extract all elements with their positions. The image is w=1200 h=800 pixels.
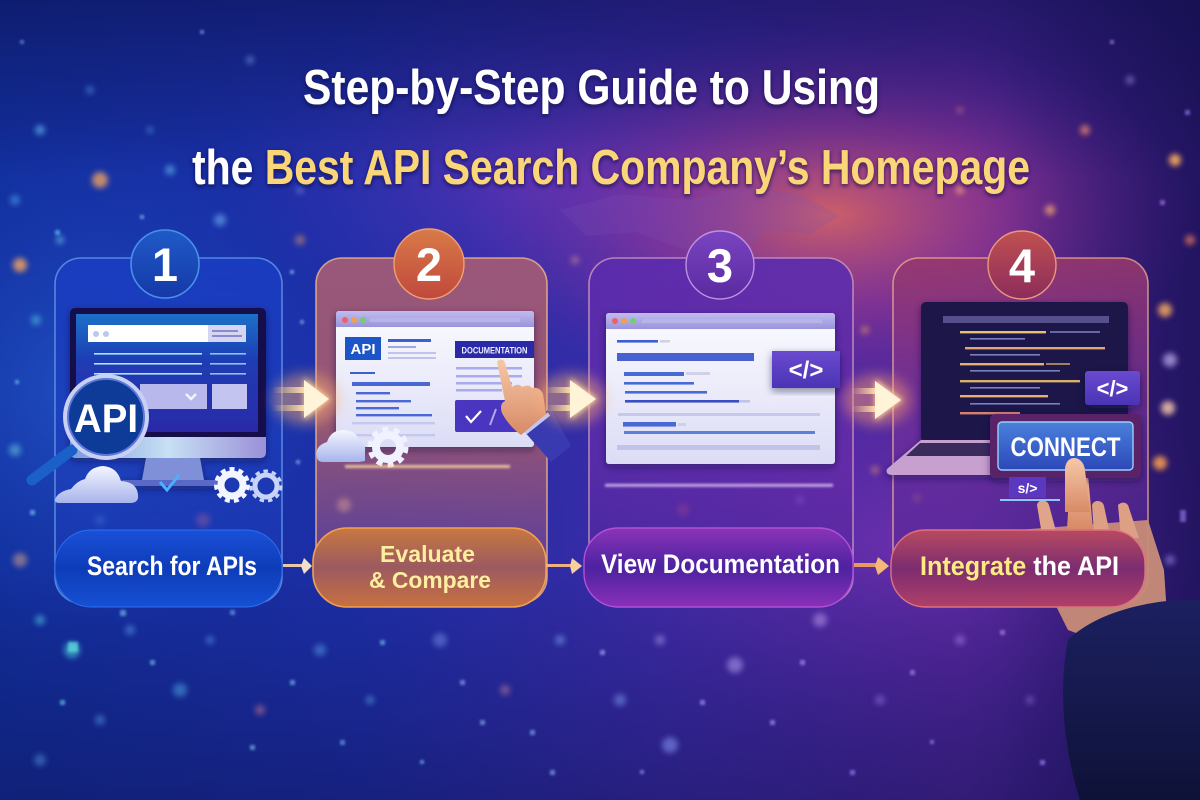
pill: Integrate the API: Integrate the API xyxy=(920,551,1119,581)
icon: desktop monitor xyxy=(70,308,266,486)
icon: gears xyxy=(216,469,281,501)
step number 4: 4 xyxy=(1009,239,1035,292)
hand sleeve xyxy=(1063,600,1200,800)
pill: Evaluate & Compare xyxy=(313,528,546,607)
step number 2 xyxy=(394,229,464,299)
code tag xyxy=(772,351,840,388)
code tag: </> xyxy=(1097,376,1128,401)
step number 3 xyxy=(686,231,754,299)
step number 1: 1 xyxy=(152,238,178,291)
code tag xyxy=(1085,371,1140,405)
step number 3: 3 xyxy=(707,239,733,292)
icon: browser window with API: DOCUMENTATION xyxy=(462,346,528,356)
title: Step-by-Step Guide to Using xyxy=(303,61,880,115)
icon: browser window with API: API xyxy=(350,341,376,358)
pill: View Documentation xyxy=(584,528,853,607)
pill: Integrate the API xyxy=(891,530,1145,607)
glow line xyxy=(345,465,510,468)
icon: pointing hand xyxy=(497,359,571,462)
small arrow 1 xyxy=(283,558,312,574)
pill: Search for APIs xyxy=(55,530,282,607)
connect button: CONNECT xyxy=(1010,432,1121,462)
icon: browser window with API xyxy=(336,311,534,447)
step number 4 xyxy=(988,231,1056,299)
icon: API magnifying glass xyxy=(32,374,149,480)
glow line xyxy=(605,484,833,487)
panel 1: search for APIs xyxy=(32,230,282,607)
panel 3: view documentation xyxy=(584,231,853,607)
icon: hand over connect xyxy=(1018,459,1168,660)
arrow 2 to 3 xyxy=(538,373,606,425)
small code tag xyxy=(1000,477,1060,501)
icon: laptop with code xyxy=(887,302,1128,475)
pill: Search for APIs: Search for APIs xyxy=(87,551,257,581)
arrow 1 to 2 xyxy=(272,373,340,425)
title xyxy=(192,61,1030,195)
icon: documentation browser window xyxy=(606,313,835,464)
small code tag: s/> xyxy=(1018,480,1037,496)
small arrow 2 xyxy=(546,558,582,574)
title: the Best API Search Company’s Homepage xyxy=(192,141,1030,195)
connect button xyxy=(990,414,1141,478)
panel 2: evaluate and compare xyxy=(313,229,571,607)
pill: Evaluate & Compare: & Compare xyxy=(369,567,491,593)
step number 1 xyxy=(131,230,199,298)
fingertip xyxy=(1065,458,1090,512)
pill: Evaluate & Compare: Evaluate xyxy=(380,541,475,567)
icon: cloud xyxy=(55,466,138,503)
step number 2: 2 xyxy=(416,238,442,291)
icon: check mark xyxy=(160,475,179,490)
panel 4: integrate the API xyxy=(887,231,1168,660)
arrow 3 to 4 xyxy=(843,374,911,426)
small arrow 3 xyxy=(854,557,889,575)
code tag: </> xyxy=(789,357,823,384)
pill: View Documentation: View Documentation xyxy=(601,549,840,579)
icon: cloud and gear xyxy=(316,429,406,465)
icon: API magnifying glass: API xyxy=(74,397,138,441)
